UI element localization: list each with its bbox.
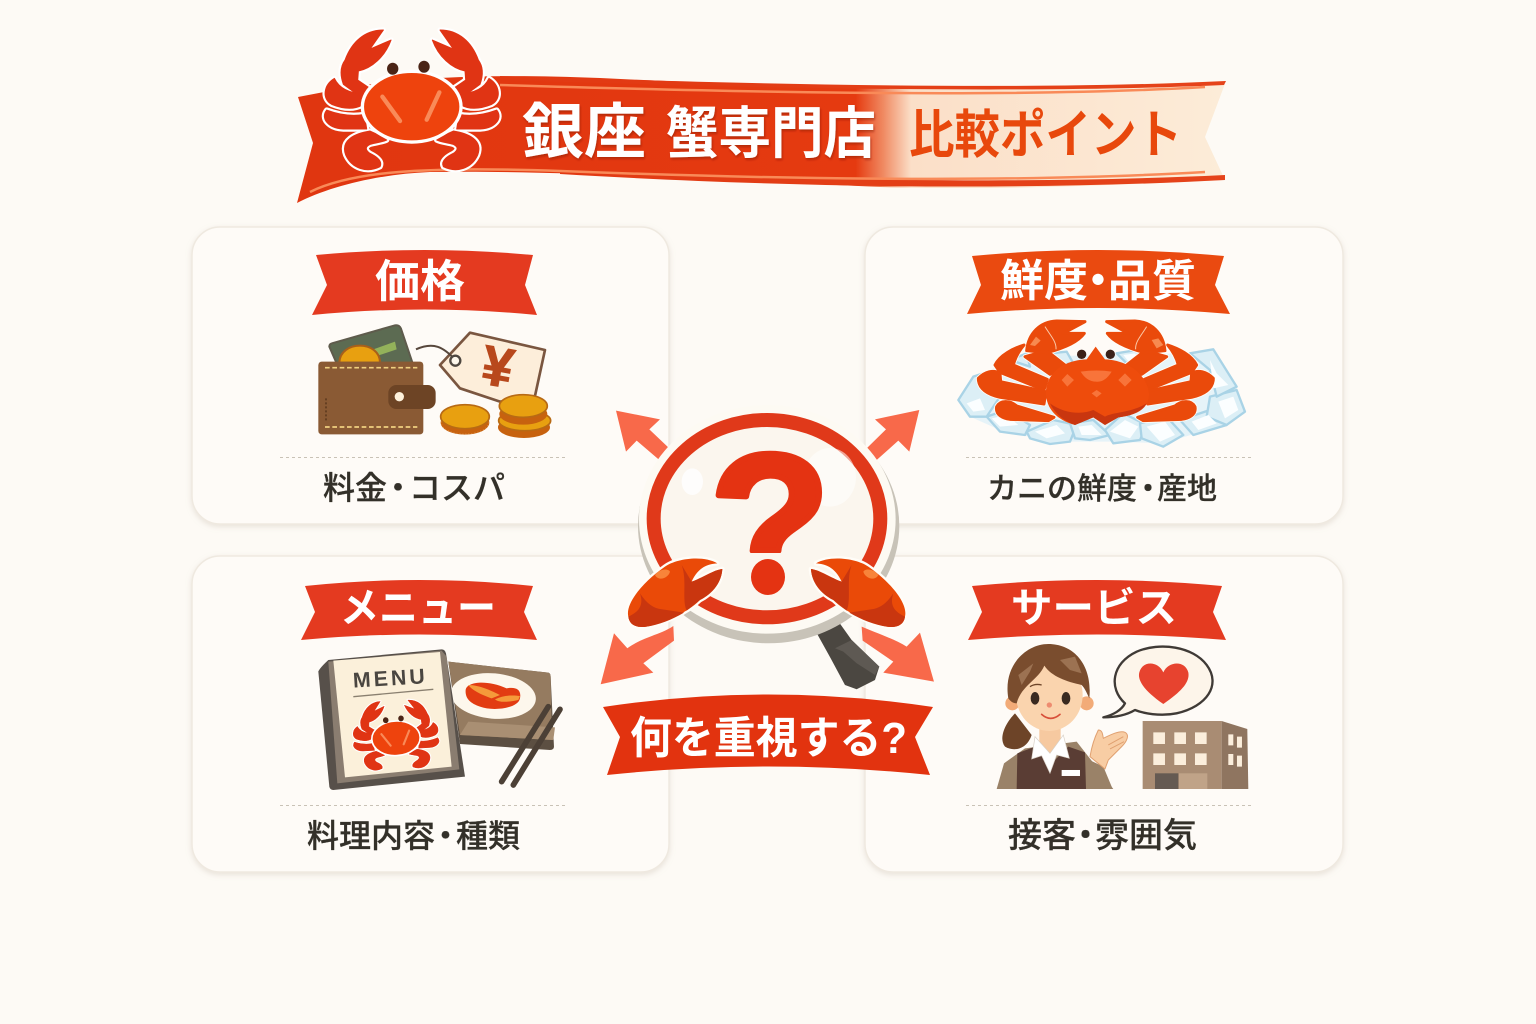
chopsticks — [502, 707, 560, 785]
plate — [449, 670, 538, 722]
heading ribbon: 価格 — [312, 250, 537, 315]
lens rim — [639, 405, 896, 634]
callout ribbon: 何を重視する? — [603, 694, 933, 775]
book cover — [318, 649, 465, 790]
banknote — [329, 325, 413, 363]
hand — [1090, 730, 1127, 769]
subtitle: カニの鮮度・産地: 産地 — [1157, 473, 1217, 506]
center: magnifying glass with arrows — [601, 405, 934, 689]
arrow: up-right — [867, 410, 919, 460]
tray — [448, 662, 554, 750]
speech bubble — [1103, 647, 1213, 717]
callout ribbon: 何を重視する?: 何を重視する? — [630, 714, 907, 763]
hair — [1007, 644, 1090, 703]
subtitle: カニの鮮度・産地: ・ — [1133, 473, 1163, 506]
banner ribbon — [297, 76, 1226, 203]
heading ribbon: サービス: サービス — [1011, 585, 1177, 631]
icon: menu book, plate and chopsticks — [318, 649, 560, 790]
heart — [1139, 663, 1189, 704]
left crab claw — [628, 558, 722, 627]
crab meat — [466, 683, 520, 709]
ears — [1005, 696, 1019, 710]
heading ribbon: 鮮度・品質: 鮮度・品質 — [1000, 257, 1196, 306]
heading ribbon: メニュー: メニュー — [340, 585, 496, 631]
title banner — [297, 30, 1226, 203]
wallet body — [318, 362, 423, 434]
panel: サービス — [865, 556, 1343, 872]
lens highlights — [682, 468, 703, 495]
arrow: up-left — [616, 411, 669, 460]
book page — [333, 652, 452, 777]
eyes and mouth — [1031, 692, 1039, 705]
face — [1016, 659, 1083, 731]
panel: 鮮度・品質 — [865, 227, 1343, 524]
icon: wallet, price tag and coins — [318, 325, 551, 438]
heading ribbon: 価格: 価格 — [375, 256, 465, 307]
lens red ring — [654, 420, 880, 617]
coin in wallet — [339, 346, 380, 363]
shirt collar — [1032, 735, 1069, 773]
coin — [441, 411, 489, 435]
arrow: down-right — [862, 627, 934, 682]
arrow: down-left — [601, 626, 674, 684]
icon: staff member, speech bubble and building — [997, 644, 1248, 789]
sleeve — [1086, 758, 1113, 789]
neck — [1039, 725, 1061, 763]
title text: 銀座 蟹専門店: 銀座 — [522, 99, 646, 166]
subtitle: 接客・雰囲気: 接客・雰囲気 — [1008, 817, 1197, 855]
crab legs and claws — [978, 321, 1213, 421]
subtitle: 料金・コスパ: 料金・コスパ — [323, 470, 505, 506]
price tag — [440, 333, 545, 402]
menu crab — [351, 699, 440, 771]
magnifier handle — [815, 617, 879, 689]
question mark: ? — [710, 413, 830, 634]
MENU label: MENU — [352, 664, 427, 693]
title text: 銀座 蟹専門店: 蟹専門店 — [666, 102, 876, 165]
ice — [963, 352, 1242, 443]
heading ribbon: メニュー — [301, 580, 537, 640]
building — [1143, 721, 1222, 789]
question mark — [716, 450, 822, 595]
icon: crab on ice — [958, 321, 1245, 447]
coin stack — [498, 417, 550, 438]
wallet clasp — [388, 385, 436, 409]
heading ribbon: 鮮度・品質 — [967, 250, 1230, 314]
panel: 価格 — [192, 227, 669, 524]
panel: メニュー — [192, 556, 669, 872]
crab body — [1046, 347, 1149, 425]
subtitle: カニの鮮度・産地: カニの鮮度 — [987, 473, 1137, 506]
icon: title crab — [324, 30, 499, 170]
lens shadow — [638, 409, 899, 643]
vest — [1017, 747, 1086, 789]
ponytail — [1002, 713, 1032, 749]
heading ribbon: サービス — [968, 580, 1226, 640]
yen sign: ¥ — [477, 333, 519, 400]
right crab claw — [811, 558, 905, 627]
title text: 銀座 蟹専門店 — [522, 99, 876, 166]
title text: 比較ポイント: 比較ポイント — [909, 107, 1182, 165]
name tag — [1062, 770, 1080, 776]
subtitle: 料理内容・種類: 料理内容・種類 — [307, 818, 520, 854]
jacket — [997, 742, 1113, 789]
